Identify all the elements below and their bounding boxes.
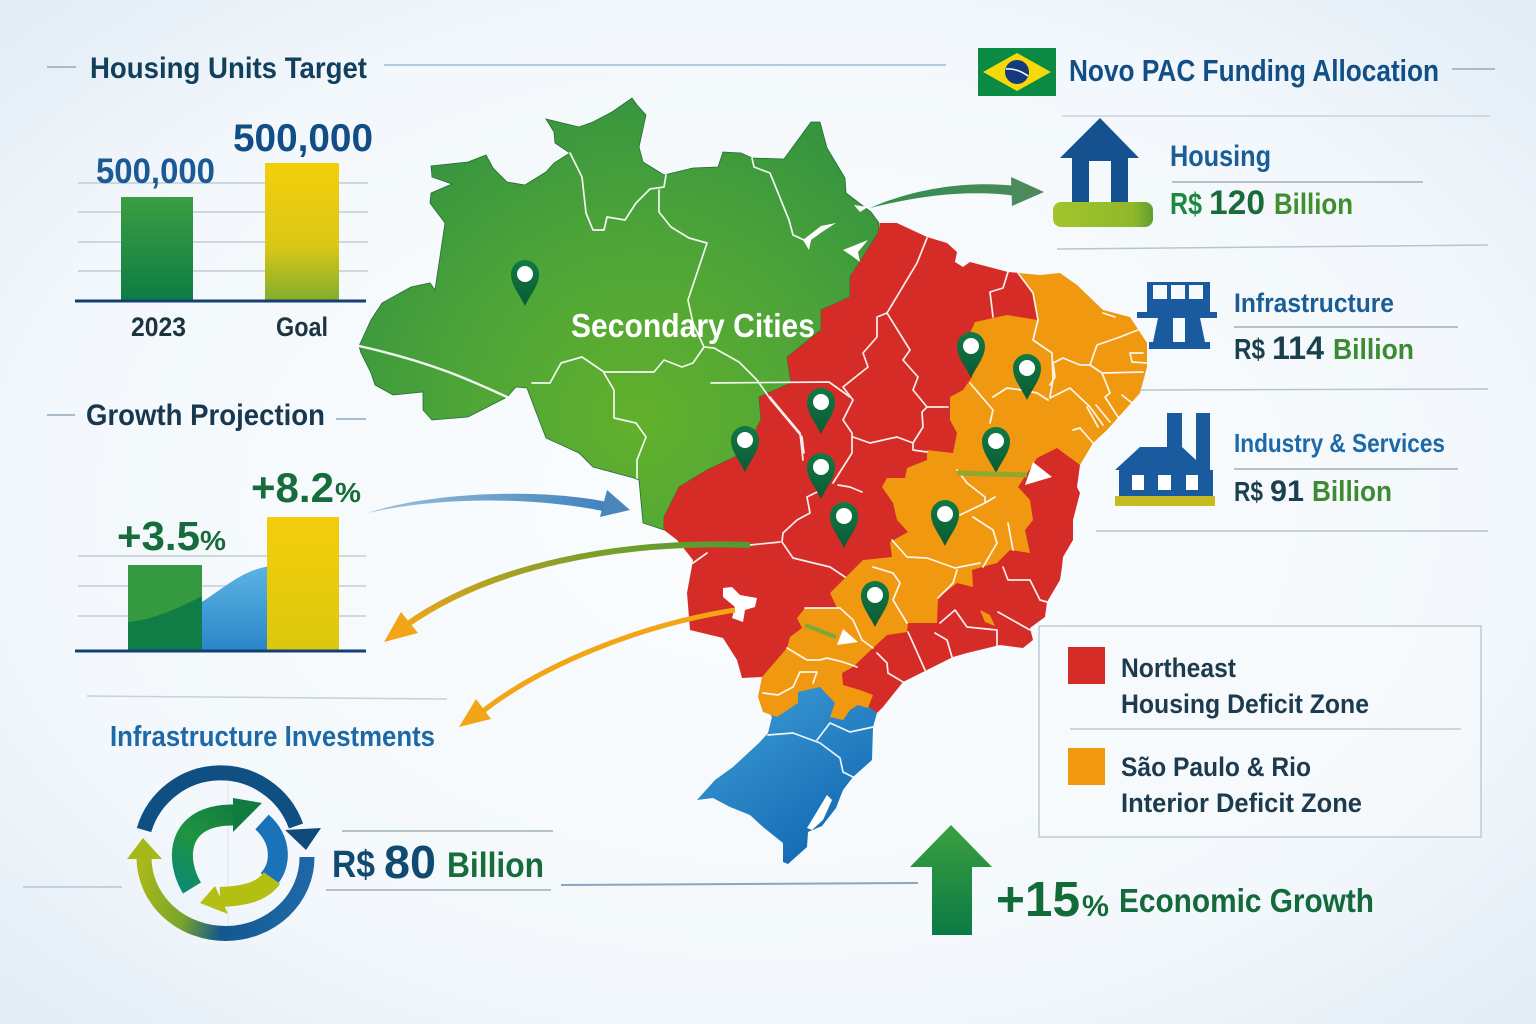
legend item: Sao Paulo and Rio (1068, 748, 1362, 818)
icon: factory (1115, 413, 1215, 506)
panel: housing units target (47, 52, 946, 342)
heading: funding allocation with flag (978, 48, 1495, 96)
value: industry: Billion (1312, 476, 1392, 508)
legend item: Sao Paulo and Rio: São Paulo & Rio (1121, 752, 1311, 782)
map label: Secondary Cities (571, 307, 815, 344)
callout: economic growth: +15 (996, 873, 1080, 927)
legend item: northeast (1068, 647, 1369, 719)
value: R$ 80 Billion: Billion (447, 846, 544, 885)
icon: house (1053, 118, 1153, 227)
value: infrastructure: Billion (1333, 334, 1414, 366)
bar and area chart: growth: +8.2 (251, 464, 334, 511)
value: infrastructure: 114 (1272, 330, 1324, 366)
heading: housing units target: Housing Units Target (90, 52, 367, 85)
bar chart: housing units (75, 117, 373, 342)
white inlets and lakes (723, 205, 868, 830)
arrow: map to infrastructure (459, 610, 735, 727)
arrow: growth to map (368, 490, 630, 517)
value: R$ 80 Billion: R$ (332, 844, 375, 886)
panel: industry and services funding (1115, 413, 1458, 508)
value: housing: R$ (1170, 186, 1202, 221)
bar and area chart: growth: % (200, 525, 226, 556)
value: housing (1170, 184, 1353, 222)
legend (1039, 626, 1481, 837)
coastal orange fragment (980, 610, 995, 626)
bar chart: housing units: 500,000 (96, 152, 215, 191)
location pins (511, 260, 1041, 627)
panel: industry and services funding: Industry & Services (1234, 428, 1445, 458)
legend item: northeast: Housing Deficit Zone (1121, 689, 1369, 719)
panel: infrastructure funding (1137, 282, 1458, 366)
region: south (blue) (697, 687, 877, 864)
value: housing: Billion (1274, 188, 1353, 221)
icon: bridge (1137, 282, 1217, 349)
region borders (359, 153, 1147, 777)
small white arrows on map (805, 462, 1052, 645)
value: housing: 120 (1209, 184, 1265, 222)
bar and area chart: growth (75, 464, 366, 651)
value: industry (1234, 475, 1392, 508)
panel: growth projection (47, 399, 366, 651)
map of Brazil (359, 98, 1147, 864)
legend item: northeast: Northeast (1121, 653, 1236, 683)
icon: up arrow (910, 825, 992, 935)
icon: circular arrows (127, 773, 321, 934)
value: R$ 80 Billion: 80 (384, 836, 436, 888)
callout: economic growth (910, 825, 1374, 935)
heading: growth projection: Growth Projection (86, 399, 325, 432)
bar chart: housing units: Goal (276, 312, 328, 342)
value: R$ 80 Billion (326, 831, 553, 890)
heading: funding allocation with flag: Novo PAC Funding Allocation (1069, 53, 1439, 88)
value: industry: 91 (1270, 475, 1304, 508)
bar and area chart: growth: +3.5 (117, 513, 200, 559)
value: infrastructure: R$ (1234, 334, 1265, 366)
arrow: map to growth chart (384, 544, 750, 642)
panel: housing funding (1053, 118, 1423, 227)
panel: infrastructure investments (23, 696, 918, 934)
region: central and coastal housing deficit (red) (664, 223, 1080, 713)
heading: infrastructure investments: Infrastructure Investments (110, 721, 435, 753)
bar chart: housing units: 500,000 (233, 117, 373, 160)
panel: infrastructure funding: Infrastructure (1234, 288, 1394, 318)
callout: economic growth: % (1082, 890, 1109, 923)
bar chart: housing units: 2023 (131, 312, 186, 342)
arrow: map to housing funding (870, 177, 1044, 208)
value: infrastructure (1234, 330, 1414, 366)
bar and area chart: growth: % (335, 477, 361, 508)
region: north (green) (359, 98, 879, 530)
value: industry: R$ (1234, 476, 1263, 507)
region: interior deficit (orange) (758, 273, 1147, 720)
legend item: Sao Paulo and Rio: Interior Deficit Zone (1121, 788, 1362, 818)
panel: housing funding: Housing (1170, 140, 1271, 173)
icon: Brazil flag (978, 48, 1056, 96)
callout: economic growth: Economic Growth (1119, 882, 1374, 919)
